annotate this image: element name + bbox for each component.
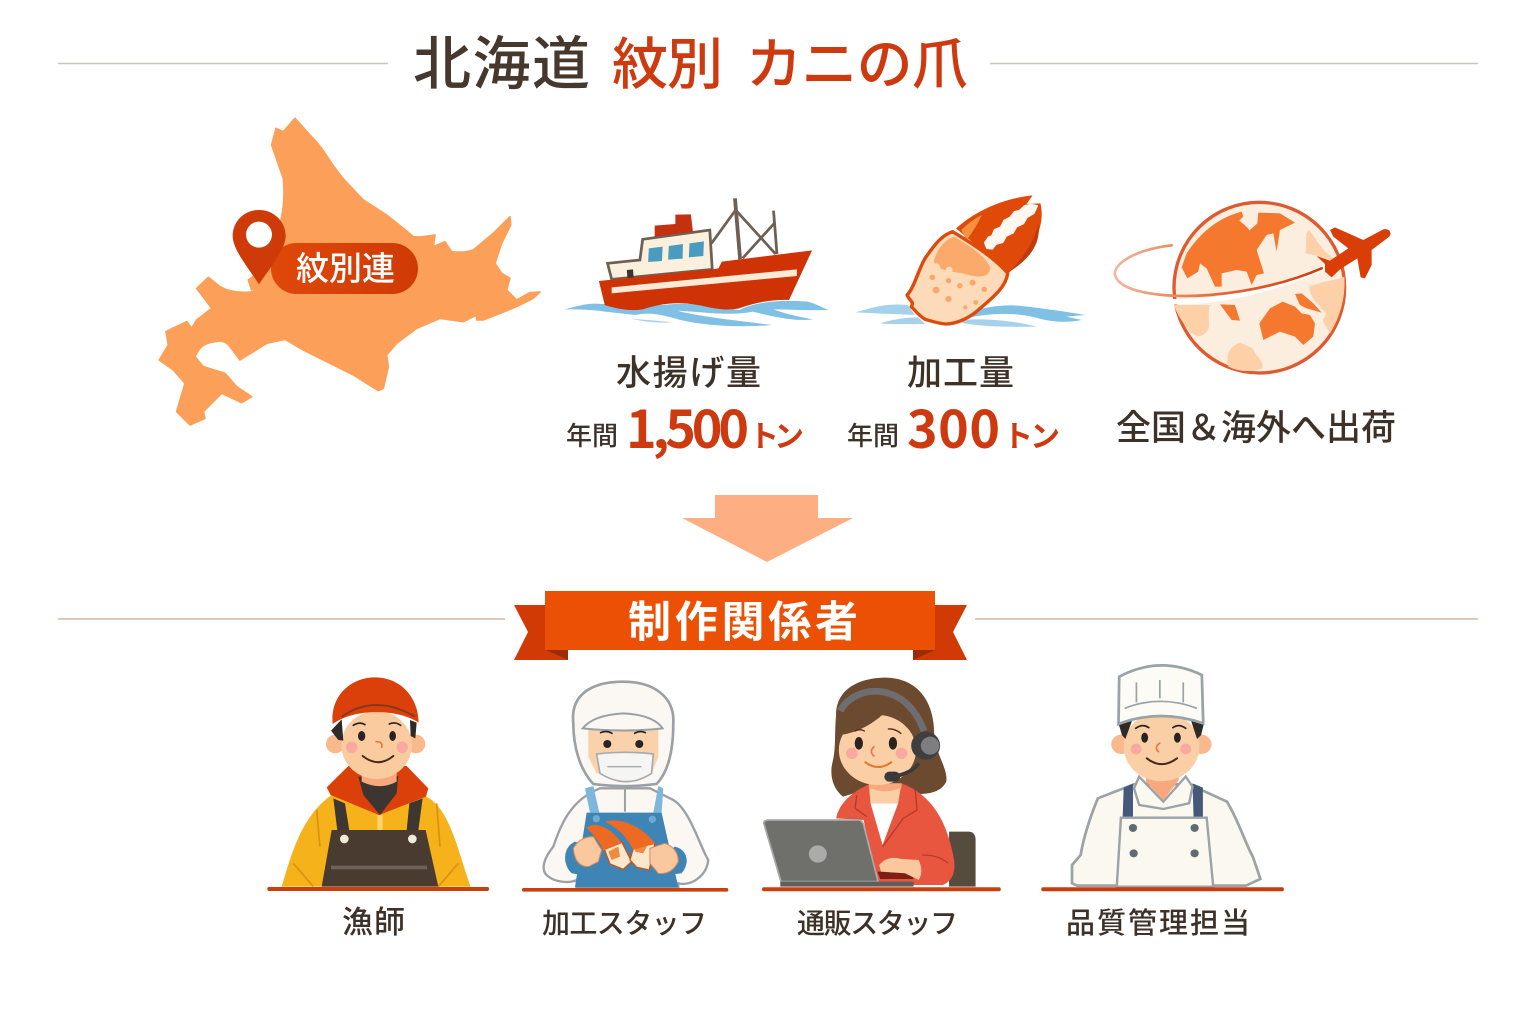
claw shell [956,195,1042,275]
caption: online sales staff: 通販スタッフ [797,902,958,942]
title: 紋別 [612,20,723,101]
caption: processing staff: 加工スタッフ [542,902,707,942]
stat: processing volume [847,345,1060,463]
ribbon heading [514,588,967,660]
crab meat [907,232,1008,324]
person: online sales staff [762,678,1001,891]
label pill: 紋別: 紋別連 [296,242,395,290]
waves [565,301,829,326]
globe [1174,202,1345,373]
person: quality manager [1041,665,1284,891]
stat: landing volume: トン [749,412,804,456]
stat: processing volume: 300 [907,388,1000,463]
claw teeth [985,205,1037,249]
title: カニの爪 [746,20,968,101]
person: processing staff [522,682,728,892]
icon: crab claw [855,195,1085,327]
location pin [233,210,286,284]
title: 北海道 [413,17,590,101]
arrow [682,495,853,562]
cabin [608,230,712,279]
crab claws in hands [587,820,655,870]
icon: fishing boat [565,198,829,326]
funnel [655,214,693,237]
person: fisherman [267,677,489,891]
caption: fisherman: 漁師 [342,897,405,942]
map: Hokkaido with Monbetsu pin [159,118,540,425]
map shape [159,118,540,425]
stat: landing volume: 水揚げ量 [616,345,761,396]
title [413,17,968,101]
orbit path [1172,267,1327,302]
ribbon heading: 制作関係者 [628,588,858,650]
label pill: 紋別 [271,242,418,294]
mast rigging [712,210,777,258]
caption: quality manager: 品質管理担当 [1066,900,1250,942]
windows [648,241,704,262]
stat: landing volume [566,345,804,463]
light continents [1174,231,1345,371]
icon: globe with airplane [1115,202,1390,373]
orange continents [1182,212,1295,287]
stat: landing volume: 年間 [566,416,618,453]
stat: processing volume: 加工量 [907,345,1014,396]
stat: processing volume: トン [1003,412,1060,456]
stat: landing volume: 1,500 [626,388,749,463]
airplane [1317,227,1390,278]
hull [599,250,812,310]
shipping text: 全国＆海外へ出荷 [1116,400,1396,451]
stat: processing volume: 年間 [847,416,899,453]
